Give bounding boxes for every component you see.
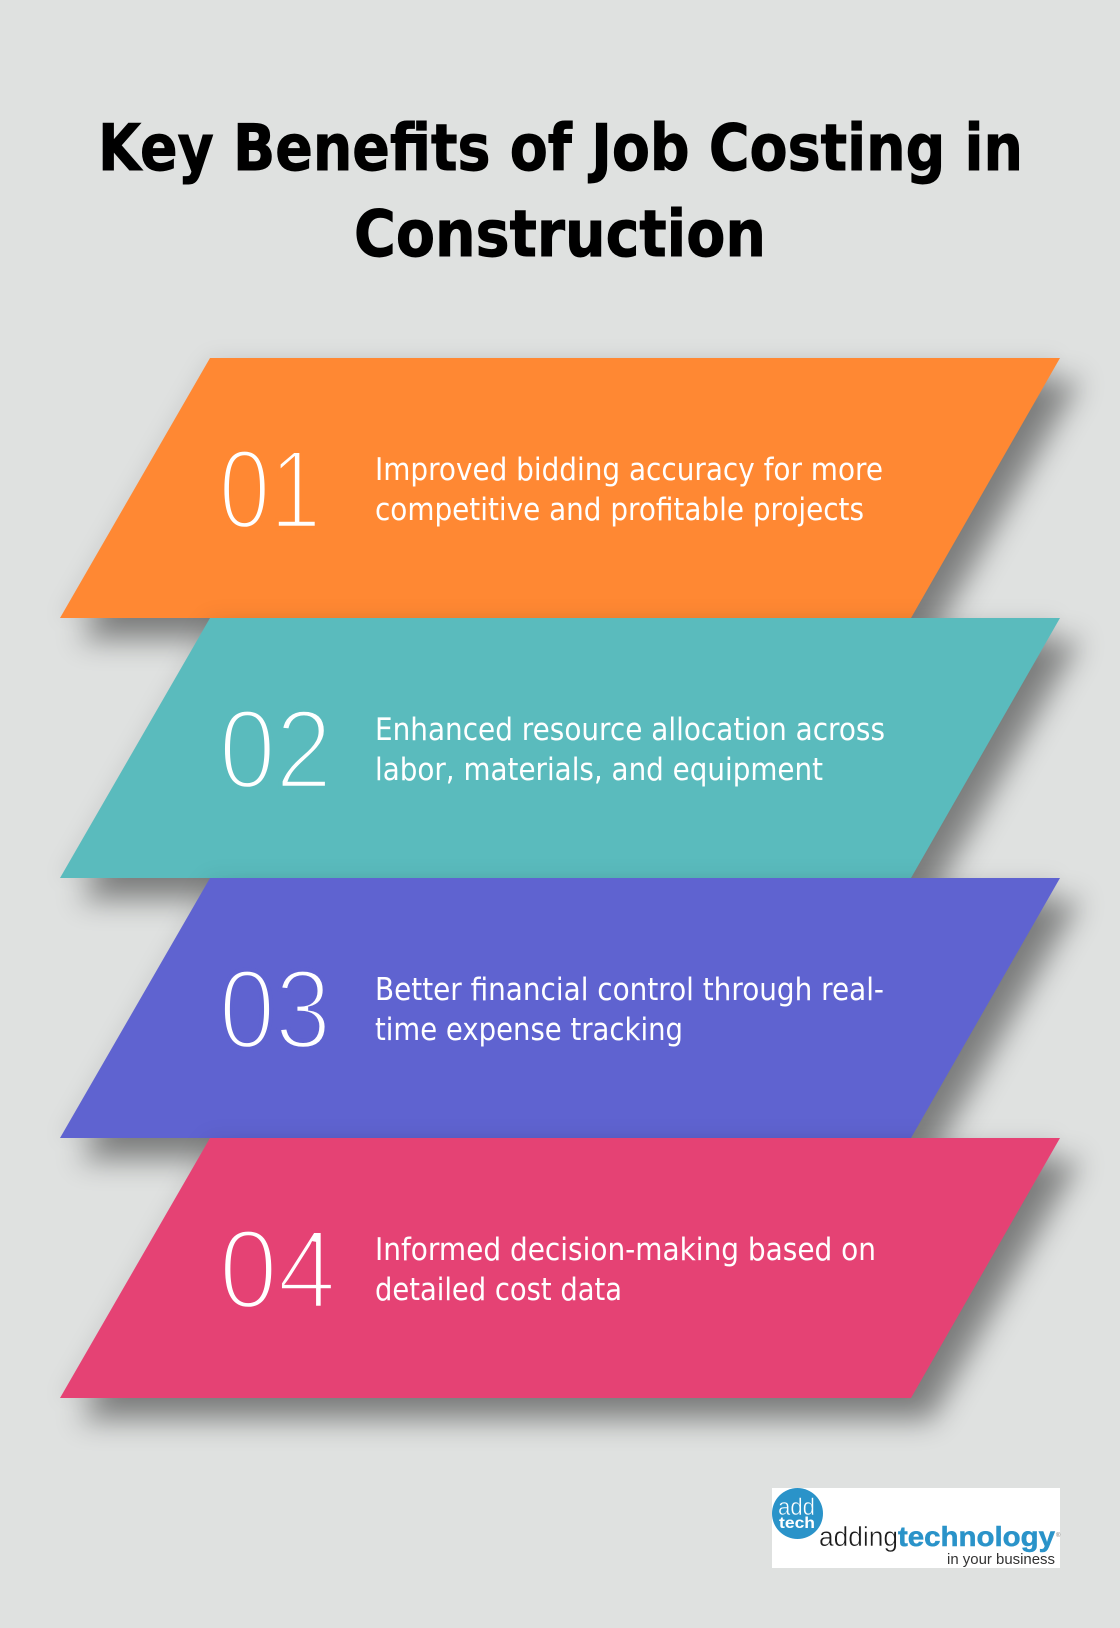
wordmark: technology bbox=[898, 1521, 1055, 1552]
text: decision-making bbox=[375, 1232, 876, 1308]
text: financial control: time expense tracking bbox=[375, 1012, 683, 1048]
panel: 03 financial control bbox=[60, 878, 1060, 1138]
panel: 02 resource allocation bbox=[60, 618, 1060, 878]
wordmark: ® bbox=[1056, 1532, 1061, 1539]
icon: add tech circle bbox=[772, 1488, 823, 1539]
wordmark bbox=[819, 1521, 1061, 1552]
text: bidding accuracy bbox=[375, 452, 883, 528]
pink parallelogram bbox=[60, 1138, 1060, 1398]
number 02: 02 bbox=[219, 687, 332, 812]
text: decision-making: detailed cost data bbox=[375, 1272, 622, 1308]
logo: adding technology bbox=[772, 1488, 1061, 1568]
text: resource allocation: labor, materials, and equipment bbox=[375, 752, 823, 788]
number 04: 04 bbox=[219, 1207, 336, 1332]
orange parallelogram bbox=[60, 358, 1060, 618]
number 01: 01 bbox=[219, 427, 321, 552]
text: financial control bbox=[375, 972, 884, 1048]
title bbox=[98, 112, 1023, 272]
icon: add tech circle: tech bbox=[779, 1515, 815, 1532]
icon: add tech circle: add bbox=[778, 1494, 815, 1521]
tagline: in your business bbox=[947, 1551, 1055, 1568]
panel: 01 bidding accuracy bbox=[60, 358, 1060, 618]
text: resource allocation bbox=[375, 712, 885, 788]
indigo parallelogram bbox=[60, 878, 1060, 1138]
number 03: 03 bbox=[219, 947, 331, 1072]
wordmark: adding bbox=[819, 1521, 898, 1552]
text: resource allocation: Enhanced resource allocation across bbox=[375, 712, 885, 748]
text: bidding accuracy: competitive and profitable projects bbox=[375, 492, 864, 528]
panel: 04 decision-making bbox=[60, 1138, 1060, 1398]
teal parallelogram bbox=[60, 618, 1060, 878]
text: decision-making: Informed decision-making based on bbox=[375, 1232, 876, 1268]
title: Construction bbox=[354, 198, 766, 272]
text: financial control: Better financial control through real- bbox=[375, 972, 884, 1008]
text: bidding accuracy: Improved bidding accuracy for more bbox=[375, 452, 883, 488]
